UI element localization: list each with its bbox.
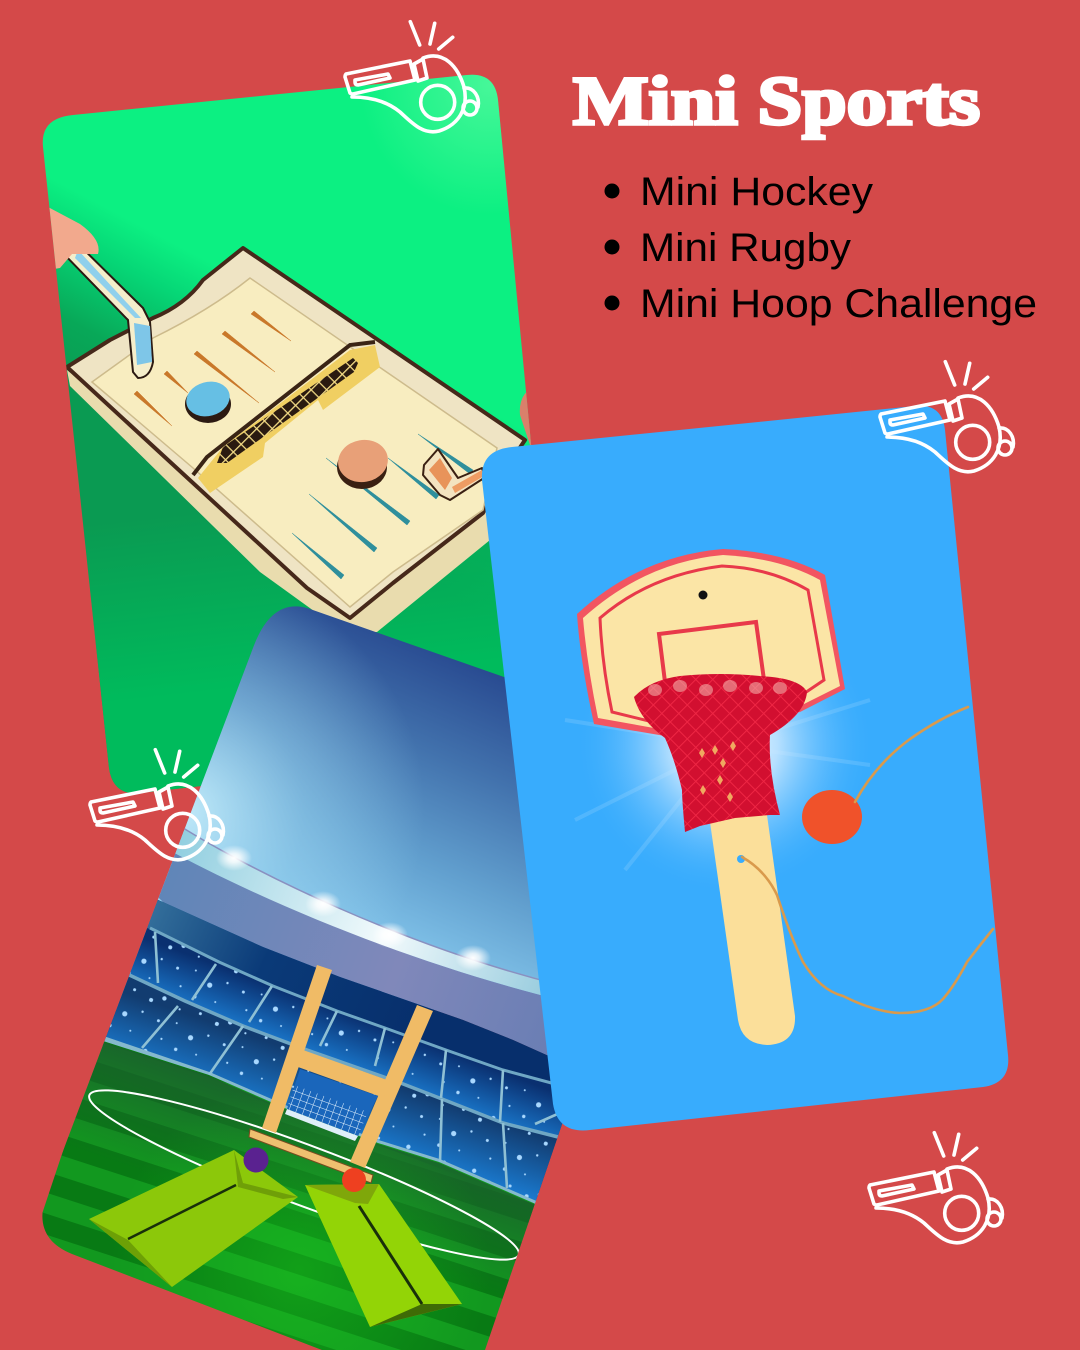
panel: mini rugby photo [42, 606, 562, 1350]
bullet list: Mini Rugby [640, 226, 851, 270]
panel: mini hockey photo [42, 74, 532, 793]
backboard [577, 549, 845, 736]
right paper ramp [305, 1184, 462, 1327]
bullet list [604, 170, 1037, 326]
stadium roof band [158, 828, 548, 1056]
icon: whistle top [345, 22, 478, 132]
orange puck [337, 440, 388, 489]
blue card [482, 406, 1008, 1130]
sunburst glow [565, 595, 875, 895]
string [742, 707, 993, 1013]
pitch circle [88, 1089, 519, 1261]
wooden hockey tray [48, 207, 540, 632]
lattice divider [193, 342, 380, 493]
panel: mini hoop challenge photo [482, 406, 1008, 1130]
icon: whistle bottom right [869, 1133, 1002, 1243]
grass pitch [42, 1042, 535, 1350]
left slots [134, 311, 291, 426]
green backdrop [42, 74, 532, 793]
icon: whistle left [90, 750, 223, 860]
orange hockey stick [423, 449, 484, 500]
left paper ramp [89, 1150, 298, 1287]
rugby goal posts [249, 965, 433, 1183]
title: Mini Sports [573, 63, 980, 139]
bullet list: Mini Hockey [640, 170, 873, 214]
blue hockey stick [68, 254, 154, 379]
bullet list: Mini Hoop Challenge [640, 282, 1037, 326]
right slots [292, 434, 473, 579]
orange ball [802, 790, 862, 844]
basketball net [634, 674, 807, 832]
stadium sky [116, 606, 540, 1010]
icon: whistle right [880, 362, 1013, 472]
blue puck [185, 382, 231, 423]
fingers [48, 207, 99, 270]
stadium lights [216, 845, 491, 971]
stadium seats [102, 900, 562, 1206]
goal net [285, 1069, 378, 1141]
purple pom-pom [244, 1148, 268, 1172]
orange pom-pom [342, 1168, 366, 1192]
hoop paddle stick [709, 815, 795, 1045]
